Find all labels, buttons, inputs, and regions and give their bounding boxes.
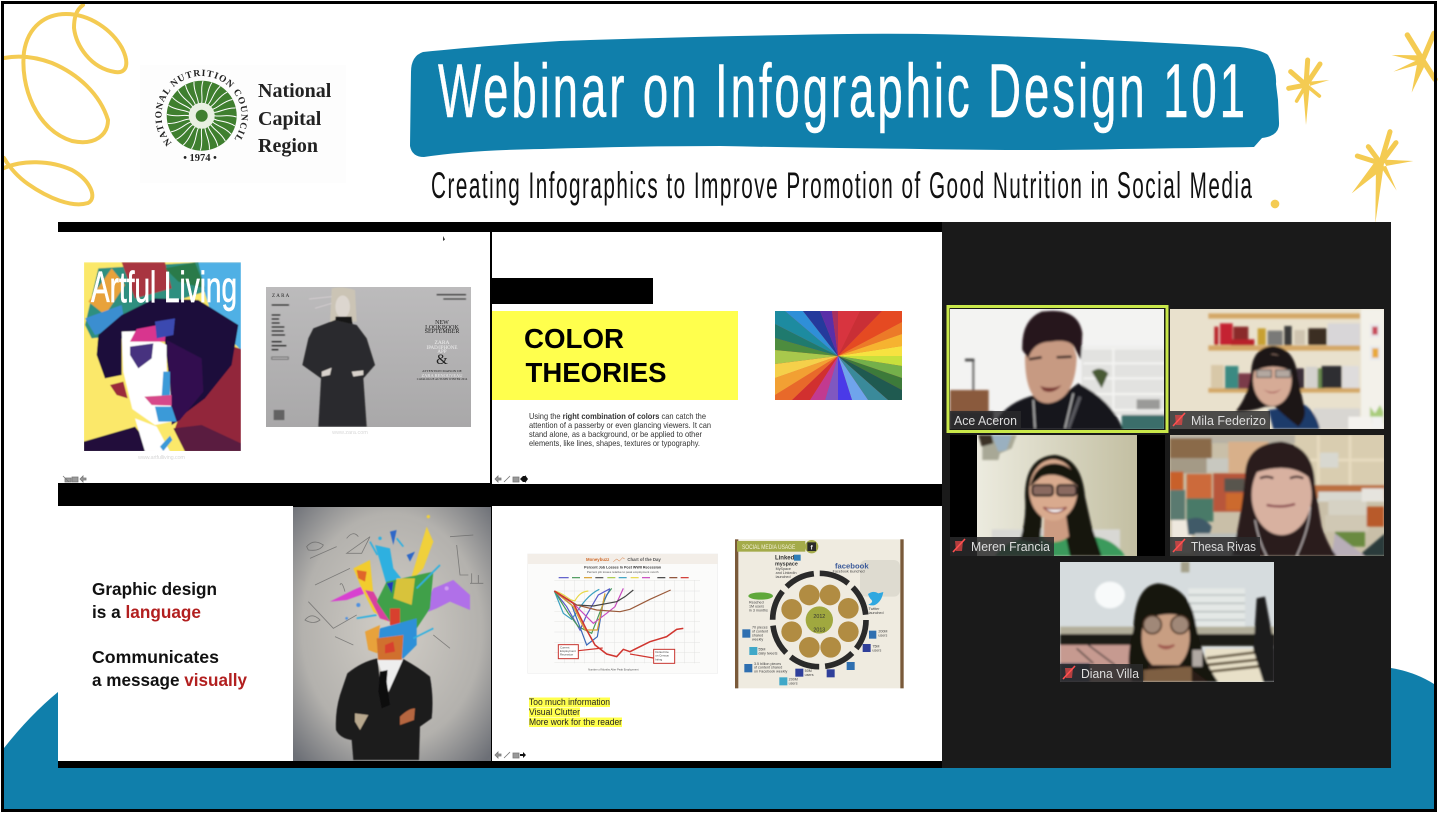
social media usage infographic: Twitter [869, 607, 880, 611]
social media usage infographic: 200M [789, 678, 798, 682]
video tile: Ace Aceron [948, 306, 1167, 432]
line chart: Employment [560, 649, 576, 653]
caption: artfulliving: www.artfulliving.com [137, 455, 185, 461]
social media usage infographic: 50M [805, 669, 812, 673]
name label: Mila Federizo [1191, 413, 1266, 428]
slide controls [63, 476, 86, 482]
decorative yellow swirl [4, 5, 126, 204]
slide controls [495, 476, 519, 482]
social media usage infographic: launched [776, 575, 791, 579]
sound icon [520, 475, 528, 483]
poster masthead: Artful Living [91, 263, 237, 312]
social media usage infographic: 200M [878, 630, 887, 634]
slide: color theories [492, 232, 942, 484]
Zara page text: IPAD/IPHONE [427, 346, 457, 351]
name label [1170, 537, 1260, 556]
logo wordmark: Region [258, 135, 318, 157]
logo seal: • 1974 • [183, 153, 217, 164]
yellow heading block: COLOR [524, 323, 624, 354]
social media usage infographic: MySpace [776, 567, 791, 571]
Zara page text: & [436, 352, 448, 368]
yellow heading block [492, 311, 738, 400]
social media usage infographic: of content shared [754, 666, 782, 670]
social media usage infographic: shared [752, 634, 763, 638]
social media usage infographic: Reached [749, 600, 764, 604]
line chart: hiring [655, 657, 663, 661]
social media usage infographic: of content [752, 630, 768, 634]
name label [950, 537, 1054, 556]
Zara page text: ZARA RENOUVEAU [421, 373, 463, 378]
Zara page text: ZARA [272, 294, 290, 299]
social media usage infographic: 75M [872, 644, 879, 648]
video tile: Mila Federizo [1170, 309, 1384, 430]
highlighted takeaways [529, 697, 622, 727]
line chart: on Census [655, 654, 669, 658]
name label: Ace Aceron [954, 413, 1017, 428]
social media usage infographic [735, 539, 904, 688]
line chart [528, 554, 718, 673]
blue wave footer [4, 668, 1434, 809]
social media usage infographic: daily tweets [758, 652, 778, 656]
video tile: Diana Villa [1060, 562, 1275, 682]
statement text: Communicates [92, 647, 219, 667]
social media usage infographic: SOCIAL MEDIA USAGE [742, 544, 796, 551]
slide: too much information [492, 506, 942, 761]
name label [1170, 411, 1270, 429]
social media usage infographic: myspace [775, 562, 798, 568]
video tile: Meren Francia [950, 435, 1165, 556]
social media usage infographic: launched [869, 611, 884, 615]
line chart: Percent Job Losses In Post WWII Recession [584, 565, 661, 569]
line chart: Current [560, 645, 570, 649]
statement text: is a language [92, 602, 201, 622]
shared screen panel [58, 222, 942, 768]
social media usage infographic: users [878, 634, 887, 638]
social media usage infographic: 55M [758, 648, 765, 652]
logo wordmark: Capital [258, 108, 322, 130]
Zara page text: APP [437, 350, 447, 355]
body paragraph: attention of a passerby or even glancing viewers. It can [529, 420, 711, 430]
title banner: Webinar on Infographic Design 101 [438, 49, 1245, 134]
logo seal: NATIONAL NUTRITION COUNCIL [155, 70, 248, 147]
photo: Zara lookbook [266, 287, 471, 427]
highlighted takeaways: Too much information [529, 697, 610, 707]
social media usage infographic: users [805, 673, 814, 677]
statement text [92, 579, 247, 690]
logo wordmark: National [258, 80, 332, 102]
body paragraph: Using the right combination of colors can catch the [529, 411, 706, 421]
social media usage infographic: and LinkedIn [776, 571, 797, 575]
slide controls [495, 752, 519, 758]
social media usage infographic: on Facebook weekly [754, 669, 788, 673]
Zara page text: ZARA [435, 340, 450, 346]
subtitle: Creating Infographics to Improve Promotion of Good Nutrition in Social Media [431, 166, 1252, 207]
social media usage infographic: weekly [752, 638, 763, 642]
line chart: Chart of the Day [627, 557, 661, 562]
line chart: Number of Months After Peak Employment [588, 668, 639, 672]
logo: National Nutrition Council [155, 70, 332, 164]
social media usage infographic: 70 pieces [752, 626, 768, 630]
cursor [443, 236, 445, 241]
yellow heading block: THEORIES [526, 357, 666, 388]
title banner [410, 34, 1279, 157]
body paragraph: elements, like lines, shapes, textures or typography. [529, 438, 700, 448]
line chart: Moneybuzz [586, 557, 609, 562]
Zara page text: LOOKBOOK [425, 325, 459, 331]
Zara page text [272, 294, 468, 381]
statement text: Graphic design [92, 579, 217, 599]
social media usage infographic: 2013 [813, 627, 825, 633]
Zara page text: SEPTEMBER [425, 329, 459, 335]
line chart: Dotted line [655, 650, 669, 654]
photo: man with paint splash head [293, 507, 491, 761]
Zara page text: ATTENTION MAISON DE [422, 369, 462, 373]
slide: examples of good design [58, 232, 490, 483]
social media usage infographic: Linked [775, 555, 795, 561]
rainbow image [775, 311, 902, 400]
body paragraph: stand alone, as a background, or be applied to other [529, 429, 702, 439]
name label: Thesa Rivas [1191, 539, 1256, 554]
yellow star decorations [1271, 33, 1435, 223]
video tile: Thesa Rivas [1170, 435, 1385, 557]
social media usage infographic: users [789, 682, 798, 686]
social media usage infographic: facebook [835, 562, 869, 571]
name label: Diana Villa [1081, 666, 1140, 681]
Zara page text: NEW [435, 320, 449, 326]
name label: Meren Francia [971, 539, 1051, 554]
body paragraph [529, 411, 711, 448]
poster: Artful Living [84, 262, 241, 452]
caption: zara: www.zara.com [331, 430, 368, 436]
participants panel [942, 222, 1391, 768]
redaction bar [492, 278, 653, 304]
social media usage infographic: in 3 months [749, 608, 768, 612]
slide: graphic design is a language [58, 506, 491, 761]
social media usage infographic: 1M users [749, 604, 764, 608]
highlighted takeaways: Visual Clutter [529, 707, 580, 717]
social media usage infographic: 2012 [813, 614, 825, 620]
social media usage infographic: f [811, 544, 814, 551]
forward icon [520, 752, 526, 758]
highlighted takeaways: More work for the reader [529, 717, 622, 727]
Zara page text: CATALOGUE AUTUMN WINTER 2014 [417, 377, 468, 381]
social media usage infographic: Facebook launched [833, 570, 865, 574]
line chart: Recession [560, 653, 574, 657]
line chart: Percent job losses relative to peak employment month [587, 570, 659, 574]
social media usage infographic: users [872, 648, 881, 652]
name label [1060, 664, 1143, 682]
statement text: a message visually [92, 670, 247, 690]
social media usage infographic: 3.5 billion pieces [754, 662, 781, 666]
